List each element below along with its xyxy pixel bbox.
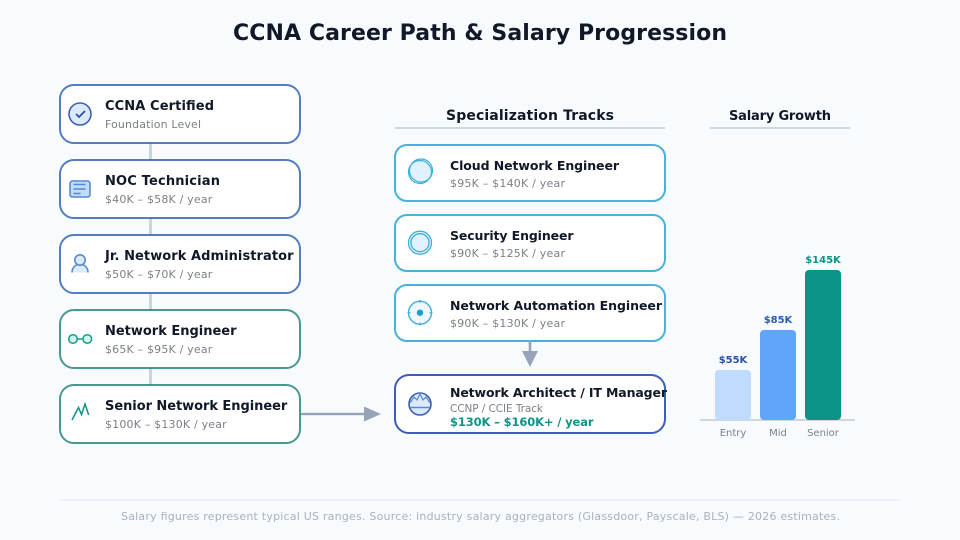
text: CCNA Certified bbox=[105, 99, 214, 131]
text: Cloud Network Engineer: Cloud Network Engineer bbox=[450, 158, 620, 173]
panel: CCNA Certified bbox=[60, 85, 300, 143]
text: CCNA Certified: CCNA Certified bbox=[105, 99, 214, 114]
bar: Senior: $145K bbox=[805, 255, 842, 266]
bar: Entry bbox=[715, 355, 751, 439]
text: Security Engineer: $90K – $125K / year bbox=[450, 247, 565, 260]
icon: gear bbox=[408, 300, 432, 326]
text: Cloud Network Engineer bbox=[450, 158, 620, 190]
text: Network Automation Engineer bbox=[450, 298, 663, 330]
icon: trend line bbox=[72, 404, 89, 420]
icon: shield bbox=[408, 231, 432, 254]
text: Senior Network Engineer: $100K – $130K / year bbox=[105, 418, 227, 431]
panel: Cloud Network Engineer bbox=[395, 145, 665, 201]
panel: Security Engineer bbox=[395, 215, 665, 271]
text: NOC Technician: $40K – $58K / year bbox=[105, 193, 213, 206]
icon: check badge bbox=[69, 103, 91, 125]
text: Network Automation Engineer: $90K – $130K / year bbox=[450, 317, 565, 330]
bar: Entry: Entry bbox=[720, 428, 746, 439]
icon: person bbox=[72, 255, 88, 272]
panel: Network Architect / IT Manager bbox=[395, 375, 668, 433]
footer note: Salary figures represent typical US ranges. Source: industry salary aggregators (Glassdoor, Payscale, BLS) — 2026 estimates. bbox=[121, 510, 840, 523]
text: Senior Network Engineer: Senior Network Engineer bbox=[105, 399, 288, 414]
icon: cloud bbox=[408, 159, 432, 184]
text: Jr. Network Administrator: Jr. Network Administrator bbox=[104, 249, 294, 264]
panel: Jr. Network Administrator bbox=[60, 235, 300, 293]
text: Network Engineer: Network Engineer bbox=[105, 324, 237, 339]
panel: Network Automation Engineer bbox=[395, 285, 665, 341]
panel: Senior Network Engineer bbox=[60, 385, 300, 443]
icon: linked nodes bbox=[69, 335, 92, 343]
connectors between career stages bbox=[149, 143, 152, 385]
arrow: senior engineer to architect bbox=[301, 406, 381, 422]
text: Jr. Network Administrator bbox=[104, 249, 294, 281]
text: Network Architect / IT Manager: Network Architect / IT Manager bbox=[450, 385, 668, 400]
text: Security Engineer bbox=[450, 228, 574, 260]
icon: terminal list bbox=[70, 181, 90, 197]
bar chart bbox=[700, 255, 855, 439]
panel: Network Engineer bbox=[60, 310, 300, 368]
text: Network Automation Engineer: Network Automation Engineer bbox=[450, 298, 663, 313]
heading: Salary Growth: Salary Growth bbox=[729, 109, 831, 124]
bar: Mid bbox=[760, 315, 796, 439]
text: Network Architect / IT Manager: CCNP / CCIE Track bbox=[450, 403, 544, 415]
text: Senior Network Engineer bbox=[105, 399, 288, 431]
bar: Entry: $55K bbox=[719, 355, 749, 366]
text: NOC Technician: NOC Technician bbox=[105, 174, 220, 189]
text: Jr. Network Administrator: $50K – $70K / year bbox=[105, 268, 213, 281]
bar: Senior bbox=[805, 255, 842, 439]
heading: Specialization Tracks: Specialization Tracks bbox=[446, 108, 614, 124]
text: NOC Technician bbox=[105, 174, 220, 206]
text: Cloud Network Engineer: $95K – $140K / year bbox=[450, 177, 565, 190]
text: Network Architect / IT Manager: $130K – $160K+ / year bbox=[450, 415, 594, 429]
arrow: tracks to architect bbox=[522, 341, 538, 367]
text: CCNA Certified: Foundation Level bbox=[105, 118, 201, 131]
bar: Senior: Senior bbox=[807, 428, 840, 439]
text: Network Engineer bbox=[105, 324, 237, 356]
text: Security Engineer: Security Engineer bbox=[450, 228, 574, 243]
text: Network Engineer: $65K – $95K / year bbox=[105, 343, 213, 356]
text: Network Architect / IT Manager bbox=[450, 385, 668, 429]
bar: Mid: Mid bbox=[769, 428, 787, 439]
icon: crown bbox=[409, 393, 431, 415]
bar: Mid: $85K bbox=[764, 315, 794, 326]
heading: Salary Growth bbox=[710, 109, 850, 129]
title: CCNA Career Path & Salary Progression bbox=[233, 21, 727, 46]
panel: NOC Technician bbox=[60, 160, 300, 218]
